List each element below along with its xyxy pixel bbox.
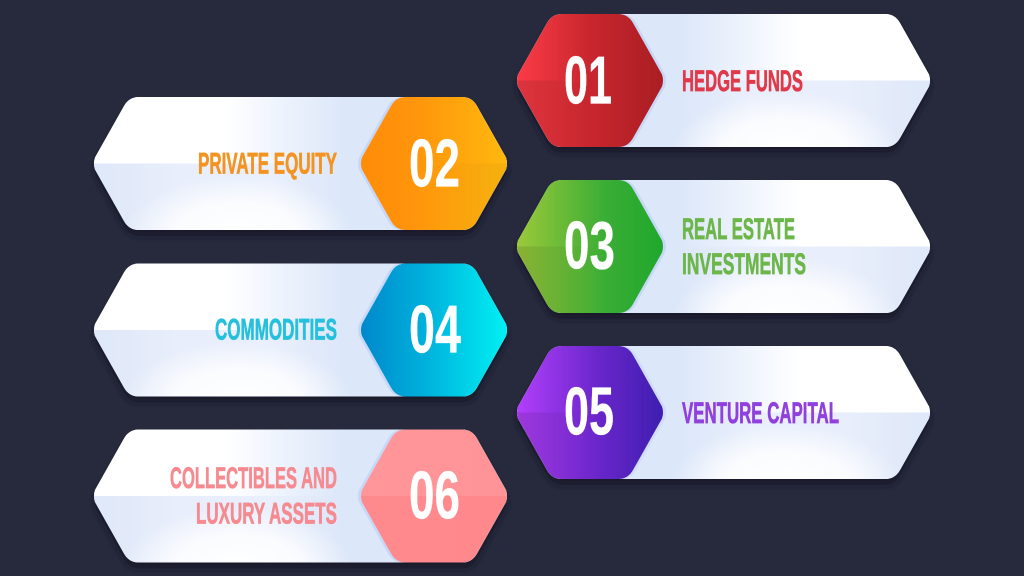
- panel: 06 collectibles and luxury assets: [94, 430, 507, 562]
- number 02: 02: [409, 126, 460, 202]
- label: venture capital: VENTURE CAPITAL: [682, 397, 839, 430]
- card and hexagon shape: [517, 180, 930, 313]
- panel: 02 private equity: [94, 97, 507, 230]
- card and hexagon shape: [94, 430, 507, 562]
- panel: 05 venture capital: [517, 346, 930, 479]
- number 01: 01: [564, 42, 612, 118]
- card and hexagon shape: [94, 264, 507, 396]
- label: real estate investments: REAL ESTATE: [682, 213, 795, 246]
- label: private equity: PRIVATE EQUITY: [198, 148, 337, 180]
- label: collectibles and luxury assets: [170, 462, 337, 530]
- label: real estate investments: [682, 213, 806, 281]
- label: hedge funds: HEDGE FUNDS: [682, 65, 803, 98]
- number 03: 03: [564, 208, 615, 284]
- label: commodities: COMMODITIES: [215, 314, 337, 346]
- panel: 01 hedge funds: [517, 14, 930, 147]
- label: real estate investments: INVESTMENTS: [682, 248, 806, 281]
- number 06: 06: [409, 458, 460, 534]
- panel: 03 real estate investments: [517, 180, 930, 313]
- card and hexagon shape: [94, 97, 507, 230]
- label: collectibles and luxury assets: LUXURY ASSETS: [196, 498, 337, 530]
- card and hexagon shape: [517, 14, 930, 147]
- panel: 04 commodities: [94, 264, 507, 396]
- number 04: 04: [409, 292, 461, 368]
- number 05: 05: [564, 374, 614, 450]
- card and hexagon shape: [517, 346, 930, 479]
- label: collectibles and luxury assets: COLLECTIBLES AND: [170, 462, 337, 495]
